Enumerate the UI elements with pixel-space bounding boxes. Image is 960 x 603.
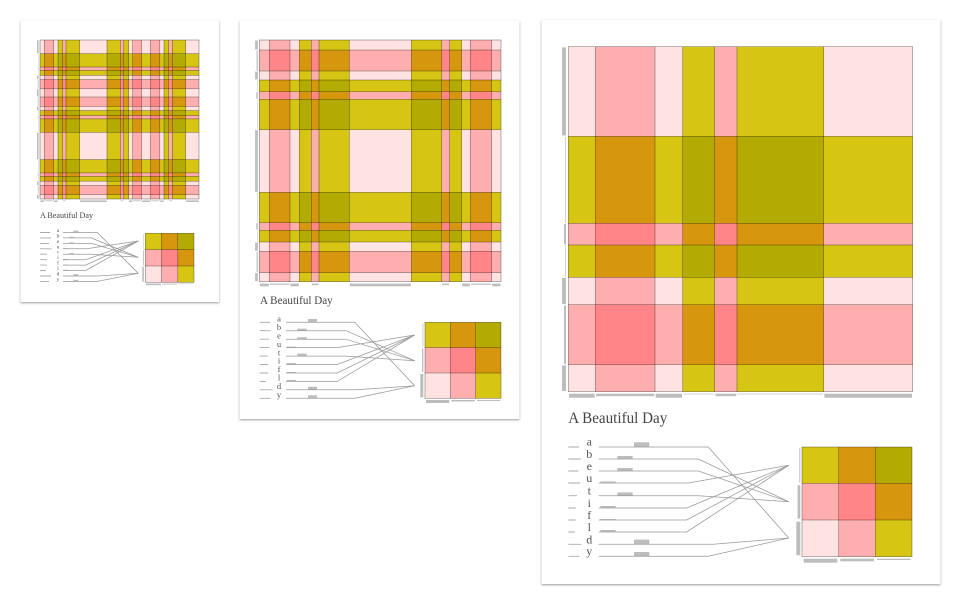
marginal bars: medium: [255, 40, 500, 286]
title: medium: A Beautiful Day: [260, 293, 333, 307]
letter rows: large: b: [586, 447, 592, 461]
legend matrix: large: [796, 447, 912, 563]
panel: small poster: [20, 20, 219, 302]
letter rows: small: e: [57, 239, 60, 245]
letter rows: large: [568, 435, 649, 558]
title: small: A Beautiful Day: [40, 210, 94, 220]
marginal bars: small: [37, 40, 199, 202]
letter rows: medium: a: [277, 314, 281, 324]
letter rows: large: d: [586, 532, 592, 546]
panel: medium poster: [240, 20, 520, 419]
letter rows: small: y: [57, 277, 60, 283]
letter rows: large: a: [587, 435, 593, 449]
letter rows: small: [40, 228, 78, 283]
letter rows: small: i: [57, 255, 59, 261]
plaid chart: large: [568, 47, 913, 392]
letter rows: medium: e: [277, 330, 281, 340]
title: large: A Beautiful Day: [568, 410, 667, 427]
legend matrix: small: [142, 233, 194, 285]
panel: large poster: [542, 20, 940, 584]
connector lines: small: [63, 232, 138, 281]
legend matrix: medium: [420, 322, 501, 403]
plaid chart: medium: [259, 40, 501, 282]
letter rows: large: f: [587, 508, 591, 522]
letter rows: large: i: [588, 496, 592, 510]
letter rows: small: l: [57, 266, 59, 272]
letter rows: large: l: [588, 520, 592, 534]
letter rows: large: t: [588, 484, 592, 498]
letter rows: medium: [260, 314, 317, 400]
letter rows: medium: l: [278, 373, 281, 383]
letter rows: small: d: [57, 272, 60, 278]
plaid chart: small: [40, 40, 199, 199]
letter rows: medium: t: [278, 347, 281, 357]
letter rows: medium: i: [278, 356, 281, 366]
letter rows: small: t: [57, 250, 59, 256]
connector lines: medium: [286, 322, 415, 398]
letter rows: medium: b: [277, 322, 281, 332]
marginal bars: large: [562, 47, 912, 398]
letter rows: medium: u: [277, 339, 282, 349]
letter rows: small: b: [57, 233, 60, 239]
letter rows: small: a: [57, 228, 60, 234]
letter rows: small: u: [57, 244, 60, 250]
letter rows: large: u: [586, 471, 592, 485]
letter rows: medium: y: [277, 390, 282, 400]
letter rows: large: y: [586, 544, 592, 558]
letter rows: medium: d: [277, 381, 282, 391]
letter rows: small: f: [57, 260, 59, 267]
letter rows: medium: f: [278, 364, 281, 374]
connector lines: large: [599, 447, 789, 556]
letter rows: large: e: [587, 459, 592, 473]
